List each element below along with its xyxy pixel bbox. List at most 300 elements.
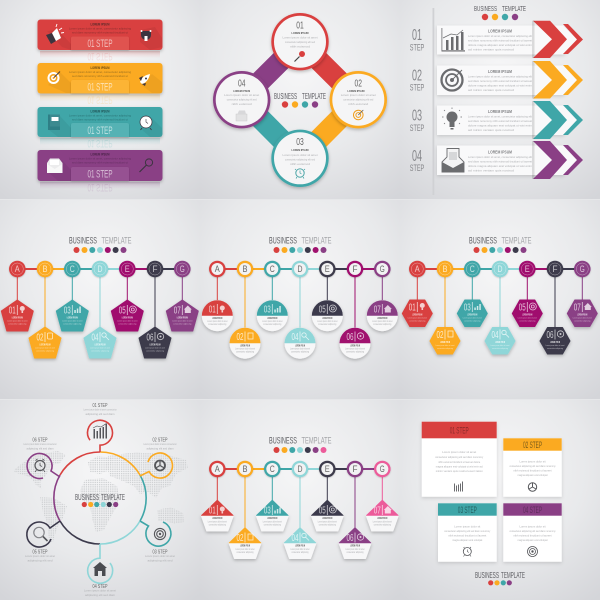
title <box>469 236 532 253</box>
circle 04: 04 <box>238 78 246 90</box>
row 03: STEP <box>410 123 424 133</box>
step F 06: 06 <box>346 332 354 343</box>
row 03: ad minim veniam quis nostrud <box>468 128 515 132</box>
step D 04: D <box>498 264 503 274</box>
title: TEMPLATE <box>102 236 132 246</box>
card 03: 03 STEP <box>458 505 477 516</box>
circle 02: Lorem ipsum dolor sit amet <box>341 94 376 97</box>
row 02: dolore magna aliquam erat volutpat ut wisi enim <box>468 84 532 88</box>
circle 04: nibh euismod <box>232 104 253 106</box>
step C 03: LOREM IPSUM <box>267 316 277 320</box>
circle 01: nibh euismod <box>290 46 311 48</box>
step G 07: Lorem ipsum dolor sit amet <box>573 316 592 320</box>
step B 02: consectetur adipiscing <box>236 551 254 554</box>
banner 2 orange: 01 STEP <box>88 82 112 94</box>
step D 04: LOREM IPSUM <box>94 344 106 346</box>
icon: magnifier <box>294 51 305 62</box>
banner 2 orange <box>38 63 162 106</box>
step F 06: LOREM IPSUM <box>150 344 161 346</box>
step 05: 05 STEP <box>32 550 48 556</box>
step B 02: B <box>42 264 48 274</box>
circle 03: consectetur adipiscing elit sed <box>285 158 316 161</box>
central ring <box>54 452 146 544</box>
step A 01: A <box>15 264 20 274</box>
step G 07: Lorem ipsum dolor sit amet <box>372 320 393 323</box>
step C 03: LOREM IPSUM <box>67 316 78 320</box>
step D 04: LOREM IPSUM <box>295 343 305 347</box>
step G 07: G <box>380 264 385 274</box>
step 05: Lorem ipsum dolor sit amet <box>25 555 55 558</box>
vertical rule <box>432 8 434 195</box>
step F 06: consectetur adipiscing <box>146 350 165 352</box>
icon: trophy <box>140 30 152 41</box>
step B 02: 02 <box>236 332 244 343</box>
link line <box>217 268 382 270</box>
card 03: Lorem ipsum dolor sit <box>454 524 481 528</box>
circle 04 <box>213 71 270 128</box>
row 02: Lorem ipsum dolor sit amet, consectetur adipiscing elit <box>468 74 532 78</box>
step F 06: Lorem ipsum dolor sit amet <box>346 548 365 551</box>
step D 04: D <box>98 264 103 274</box>
icon: alarm clock <box>295 169 305 178</box>
step E 05 <box>312 261 343 331</box>
step E 05: 05 <box>519 302 526 314</box>
icon: bar chart <box>454 482 463 492</box>
card 01: magna aliquam erat volutpat ut wisi enim ad <box>436 464 483 468</box>
card 04 <box>503 503 562 562</box>
card 03: consectetur adipiscing elit sed diam nonummy <box>444 529 491 533</box>
title <box>69 236 132 253</box>
step 03: adipiscing elit sed <box>148 560 173 562</box>
step F 06: F <box>152 264 158 274</box>
card 04: nibh euismod tincidunt ut laoreet <box>514 534 552 538</box>
step 05: adipiscing elit sed <box>28 560 53 562</box>
circle 02 <box>330 71 387 128</box>
card 02: Lorem ipsum dolor sit <box>520 460 546 464</box>
banner 3 teal: 01 STEP <box>88 137 112 149</box>
banner 4 purple: sed diam nonummy nibh euismod tincidunt ut <box>72 162 128 164</box>
banner 3 teal: sed diam nonummy nibh euismod tincidunt ut <box>72 118 128 122</box>
step D 04: consectetur adipiscing <box>91 350 110 352</box>
row 03: 03 <box>412 108 422 124</box>
banner 4 purple: Lorem ipsum dolor sit amet, consectetur adipiscing <box>69 158 132 160</box>
circle 02: consectetur adipiscing elit sed <box>343 98 374 102</box>
step G 07: LOREM IPSUM <box>377 516 387 520</box>
icon: book <box>48 114 60 130</box>
panel: timeline with house shaped cards <box>201 436 398 558</box>
row 02: STEP <box>410 82 424 92</box>
card 02: nibh euismod tincidunt ut laoreet <box>514 468 552 472</box>
step 03: 03 STEP <box>152 550 168 556</box>
step E 05: E <box>325 464 330 474</box>
step E 05: E <box>125 264 130 274</box>
step E 05: Lorem ipsum dolor sit amet <box>317 320 338 323</box>
step A 01: 01 <box>409 302 416 314</box>
step C 03 <box>257 261 288 331</box>
panel: radial six steps with world map <box>14 403 188 597</box>
title: BUSINESS <box>69 236 97 246</box>
step E 05: LOREM IPSUM <box>322 516 332 520</box>
panel: circular four step cycle <box>213 13 387 187</box>
step F 06: Lorem ipsum dolor sit amet <box>345 348 365 350</box>
step E 05 <box>512 261 542 326</box>
step A 01: Lorem ipsum dolor sit amet <box>208 520 227 524</box>
card 03 <box>438 503 497 562</box>
link line <box>17 268 182 270</box>
step F 06: Lorem ipsum dolor sit amet <box>546 344 565 347</box>
row 04: ad minim veniam quis nostrud <box>468 168 515 172</box>
step A 01 <box>1 261 33 331</box>
step B 02: LOREM IPSUM <box>240 544 250 548</box>
row 04: 04 <box>412 148 422 165</box>
card 01: nibh euismod tincidunt ut laoreet dolore <box>438 460 481 464</box>
card 04: 04 STEP <box>523 505 542 516</box>
step A 01: 01 <box>209 505 216 516</box>
step D 04: Lorem ipsum dolor sit amet <box>290 348 310 350</box>
step A 01: Lorem ipsum dolor sit amet <box>408 316 427 320</box>
circle 03 <box>271 130 329 187</box>
step 02 <box>140 438 177 478</box>
circle 02: LOREM IPSUM <box>348 89 364 93</box>
step C 03 <box>256 461 288 531</box>
card 04: Lorem ipsum dolor sit <box>520 524 546 528</box>
step 02: adipiscing elit sed diam <box>146 448 174 450</box>
step B 02: LOREM IPSUM <box>240 343 250 347</box>
step A 01 <box>201 461 233 531</box>
step A 01: 01 <box>9 305 16 316</box>
row 02: 02 <box>412 68 422 84</box>
banner 1 red: Lorem ipsum dolor sit amet, consectetur adipiscing <box>69 28 132 30</box>
banner 4 purple: 01 STEP <box>88 168 112 180</box>
card 04: magna aliquam erat volutpat <box>518 538 548 542</box>
panel: square step cards <box>422 422 562 585</box>
step C 03: LOREM IPSUM <box>467 314 477 316</box>
row 04: sed diam nonummy nibh euismod tincidunt ut laoreet <box>468 160 532 164</box>
row 04 <box>410 141 583 179</box>
step C 03: C <box>270 464 275 474</box>
step A 01: consectetur adipiscing <box>409 320 426 322</box>
center title <box>75 493 125 507</box>
step D 04: Lorem ipsum dolor sit amet <box>290 548 310 551</box>
step 06: adipiscing elit sed diam <box>26 448 54 450</box>
step B 02: consectetur adipiscing <box>236 350 255 354</box>
row 02: LOREM IPSUM <box>488 69 512 74</box>
title: BUSINESS <box>269 436 297 446</box>
banner 1 red <box>38 20 162 62</box>
icon: target <box>528 546 538 556</box>
step B 02: LOREM IPSUM <box>40 344 51 346</box>
center title: TEMPLATE <box>302 92 326 101</box>
step G 07: 07 <box>174 305 181 316</box>
step A 01: Lorem ipsum dolor sit amet <box>7 320 28 322</box>
step D 04 <box>485 261 515 354</box>
banner 2 orange: sed diam nonummy nibh euismod tincidunt ut <box>72 75 128 78</box>
icon: clock <box>140 116 152 130</box>
icon: target <box>354 110 363 120</box>
step G 07: 07 <box>374 505 381 516</box>
step C 03: consectetur adipiscing <box>264 524 281 526</box>
step G 07: G <box>180 264 185 274</box>
title: BUSINESS <box>475 571 499 580</box>
step D 04: 04 <box>292 533 299 544</box>
card 04: consectetur adipiscing elit sed diam nonummy <box>510 529 556 533</box>
step 02: Lorem ipsum dolor sit amet consectetur <box>144 443 177 446</box>
step F 06 <box>540 261 570 354</box>
step D 04: consectetur adipiscing <box>292 551 309 554</box>
step C 03: 03 <box>64 305 71 316</box>
step 06 <box>24 438 60 478</box>
card 01: minim veniam quis nostrud exerci tation <box>436 469 483 473</box>
center title: TEMPLATE <box>101 493 125 502</box>
step D 04: LOREM IPSUM <box>295 544 305 548</box>
step C 03: Lorem ipsum dolor sit amet <box>463 316 482 320</box>
step A 01: consectetur adipiscing <box>209 524 226 526</box>
card 02: consectetur adipiscing elit sed diam nonummy <box>510 464 556 468</box>
step G 07: Lorem ipsum dolor sit amet <box>373 520 392 524</box>
row 03: dolore magna aliquam erat volutpat ut wisi enim <box>468 124 532 128</box>
step B 02: consectetur adipiscing <box>36 350 55 352</box>
step C 03: C <box>470 264 475 274</box>
step A 01: consectetur adipiscing <box>8 322 27 326</box>
card 01: Lorem ipsum dolor sit amet <box>442 450 476 454</box>
step C 03: 03 <box>264 304 271 316</box>
connector bands <box>242 42 358 158</box>
step E 05: LOREM IPSUM <box>322 316 332 320</box>
icon: alarm clock <box>463 547 471 556</box>
step A 01: LOREM IPSUM <box>212 316 222 320</box>
step 01: adipiscing elit sed diam <box>86 413 115 416</box>
step F 06: consectetur adipiscing <box>346 350 365 354</box>
step C 03: Lorem ipsum dolor sit amet <box>62 320 83 322</box>
row 01: LOREM IPSUM <box>488 28 512 34</box>
step E 05 <box>111 261 143 331</box>
step E 05: LOREM IPSUM <box>522 314 532 316</box>
row 01: dolore magna aliquam erat volutpat ut wisi enim <box>468 43 532 47</box>
step F 06: F <box>352 264 358 274</box>
step E 05: consectetur adipiscing <box>319 524 336 526</box>
step D 04: 04 <box>292 332 299 343</box>
step C 03: consectetur adipiscing <box>464 320 481 322</box>
step 03 <box>140 521 175 562</box>
center title: BUSINESS <box>75 493 99 502</box>
step A 01: consectetur adipiscing <box>208 323 227 326</box>
banner 4 purple: LOREM IPSUM <box>90 152 110 156</box>
row 02: sed diam nonummy nibh euismod tincidunt ut laoreet <box>468 79 532 83</box>
step E 05: LOREM IPSUM <box>122 316 133 320</box>
banner 2 orange: 01 STEP <box>88 94 112 106</box>
step G 07: 07 <box>374 304 381 316</box>
circle 04: consectetur adipiscing elit sed <box>227 98 257 102</box>
title: BUSINESS <box>474 4 497 13</box>
step B 02: 02 <box>36 332 44 343</box>
step 01: Lorem ipsum dolor sit amet consectetur <box>84 408 117 412</box>
step 01 <box>84 403 117 452</box>
step F 06 <box>339 461 371 558</box>
icon: envelope with document <box>442 148 464 172</box>
step C 03: Lorem ipsum dolor sit amet <box>262 320 283 323</box>
step G 07: LOREM IPSUM <box>377 316 387 320</box>
row 04: LOREM IPSUM <box>488 150 512 154</box>
step A 01: A <box>215 464 220 474</box>
step A 01: LOREM IPSUM <box>212 516 222 520</box>
step E 05: consectetur adipiscing <box>318 323 337 326</box>
step B 02: LOREM IPSUM <box>440 341 450 344</box>
step 04: Lorem ipsum dolor sit amet <box>84 590 116 592</box>
row 02 <box>410 61 583 98</box>
step G 07: 07 <box>574 302 581 314</box>
step B 02 <box>430 261 460 354</box>
title <box>475 571 525 585</box>
step B 02: Lorem ipsum dolor sit amet <box>235 348 255 350</box>
row 04: STEP <box>410 163 424 173</box>
panel: timeline with circles <box>202 236 398 359</box>
step F 06: consectetur adipiscing <box>346 551 364 554</box>
step B 02 <box>230 261 260 359</box>
banner 2 orange: LOREM IPSUM <box>90 66 110 70</box>
step C 03: consectetur adipiscing <box>63 322 82 326</box>
card 01: consectetur adipiscing elit sed diam nonummy <box>435 455 484 459</box>
row 01: STEP <box>410 42 424 52</box>
step 02: 02 STEP <box>152 438 168 444</box>
icon: magnifier <box>140 159 153 172</box>
banner 1 red: LOREM IPSUM <box>90 22 110 26</box>
title <box>269 236 332 253</box>
card 03: magna aliquam erat volutpat <box>452 538 482 542</box>
row 01: ad minim veniam quis nostrud <box>468 48 515 52</box>
circle 01: 01 <box>296 20 304 32</box>
title <box>269 436 332 453</box>
panel: step banners <box>38 20 162 193</box>
step C 03 <box>457 261 487 326</box>
row 03: sed diam nonummy nibh euismod tincidunt ut laoreet <box>468 119 532 123</box>
step B 02: 02 <box>436 330 444 341</box>
step F 06: F <box>552 264 558 274</box>
step 01: 01 STEP <box>92 403 108 409</box>
step D 04 <box>84 261 116 358</box>
step F 06: consectetur adipiscing <box>547 347 564 350</box>
row 03: Lorem ipsum dolor sit amet, consectetur adipiscing elit <box>468 114 532 118</box>
step E 05: 05 <box>319 304 326 316</box>
link line <box>217 468 382 470</box>
icon: target <box>442 70 462 90</box>
icon: open envelope <box>47 158 62 173</box>
step F 06: LOREM IPSUM <box>350 343 360 347</box>
step 05 <box>25 521 60 562</box>
step E 05: E <box>325 264 330 274</box>
step B 02: consectetur adipiscing <box>437 347 454 350</box>
step 04: adipiscing elit sed diam <box>85 594 115 597</box>
row 03: LOREM IPSUM <box>488 109 512 114</box>
icon: envelope <box>236 110 247 121</box>
title: BUSINESS <box>269 236 297 246</box>
step C 03: 03 <box>264 505 271 516</box>
circle 01: consectetur adipiscing elit sed <box>285 41 316 44</box>
title: TEMPLATE <box>502 236 532 246</box>
step D 04: 04 <box>92 332 99 343</box>
step B 02: Lorem ipsum dolor sit amet <box>236 548 255 551</box>
circle 02: 02 <box>355 78 362 90</box>
step E 05 <box>311 461 343 531</box>
step D 04: D <box>298 264 303 274</box>
step 04 <box>84 544 116 597</box>
step A 01 <box>402 261 432 326</box>
step G 07: consectetur adipiscing <box>373 323 392 326</box>
panel: arrow steps <box>410 4 583 195</box>
step D 04: Lorem ipsum dolor sit amet <box>490 344 510 347</box>
step G 07: G <box>580 264 585 274</box>
banner 3 teal: LOREM IPSUM <box>90 110 110 114</box>
icon: light bulb <box>442 108 462 130</box>
step G 07: LOREM IPSUM <box>577 314 587 316</box>
panel: timeline with hexagons <box>402 236 597 354</box>
banner 4 purple: 01 STEP <box>88 181 112 193</box>
center title <box>274 92 326 108</box>
step D 04 <box>284 261 316 359</box>
step 06: Lorem ipsum dolor sit amet consectetur <box>24 443 57 446</box>
icon: target <box>48 72 60 84</box>
step D 04: 04 <box>492 330 499 341</box>
step A 01: LOREM IPSUM <box>412 314 422 316</box>
step C 03: C <box>70 264 75 274</box>
circle 03: nibh euismod <box>290 164 311 166</box>
step G 07 <box>366 461 398 531</box>
step C 03: consectetur adipiscing <box>263 323 282 326</box>
circle 02: nibh euismod <box>348 104 369 106</box>
banner 3 teal <box>38 107 162 149</box>
step D 04: consectetur adipiscing <box>291 350 310 354</box>
step A 01 <box>202 261 233 331</box>
step D 04: consectetur adipiscing <box>492 347 509 350</box>
step F 06: LOREM IPSUM <box>550 341 560 344</box>
step G 07: consectetur adipiscing <box>374 524 391 526</box>
step E 05: 05 <box>319 505 326 516</box>
step E 05: 05 <box>119 305 126 316</box>
title: TEMPLATE <box>302 436 332 446</box>
banner 1 red: 01 STEP <box>88 38 112 50</box>
step G 07 <box>367 261 398 331</box>
card 02: magna aliquam erat volutpat <box>518 473 548 477</box>
row 01: 01 <box>412 27 422 44</box>
step B 02: Lorem ipsum dolor sit amet <box>35 346 55 350</box>
card 01: 01 STEP <box>450 426 469 436</box>
row 01 <box>410 21 583 58</box>
step F 06 <box>340 261 370 359</box>
link line <box>417 268 582 270</box>
icon: bar chart <box>442 28 465 52</box>
circle 01 <box>271 13 329 70</box>
banner 1 red: 01 STEP <box>88 50 112 62</box>
step B 02: B <box>242 464 248 474</box>
step F 06: 06 <box>346 533 354 544</box>
banner 3 teal: Lorem ipsum dolor sit amet, consectetur adipiscing <box>69 114 132 118</box>
step G 07: LOREM IPSUM <box>177 316 188 320</box>
banner 2 orange: Lorem ipsum dolor sit amet, consectetur adipiscing <box>69 71 132 74</box>
row 01: sed diam nonummy nibh euismod tincidunt ut laoreet <box>468 38 532 42</box>
step B 02: 02 <box>236 533 244 544</box>
circle 03: Lorem ipsum dolor sit amet <box>282 154 318 157</box>
step G 07 <box>166 261 198 331</box>
row 01: Lorem ipsum dolor sit amet, consectetur adipiscing elit <box>468 34 532 38</box>
step 04: 04 STEP <box>92 584 108 590</box>
icon: rocket <box>139 74 150 86</box>
step E 05: E <box>525 264 530 274</box>
step D 04 <box>284 461 316 558</box>
banner 4 purple <box>38 150 162 193</box>
step G 07: consectetur adipiscing <box>574 320 591 322</box>
step F 06: Lorem ipsum dolor sit amet <box>145 346 165 350</box>
step D 04: LOREM IPSUM <box>495 341 505 344</box>
step A 01: Lorem ipsum dolor sit amet <box>207 320 228 323</box>
